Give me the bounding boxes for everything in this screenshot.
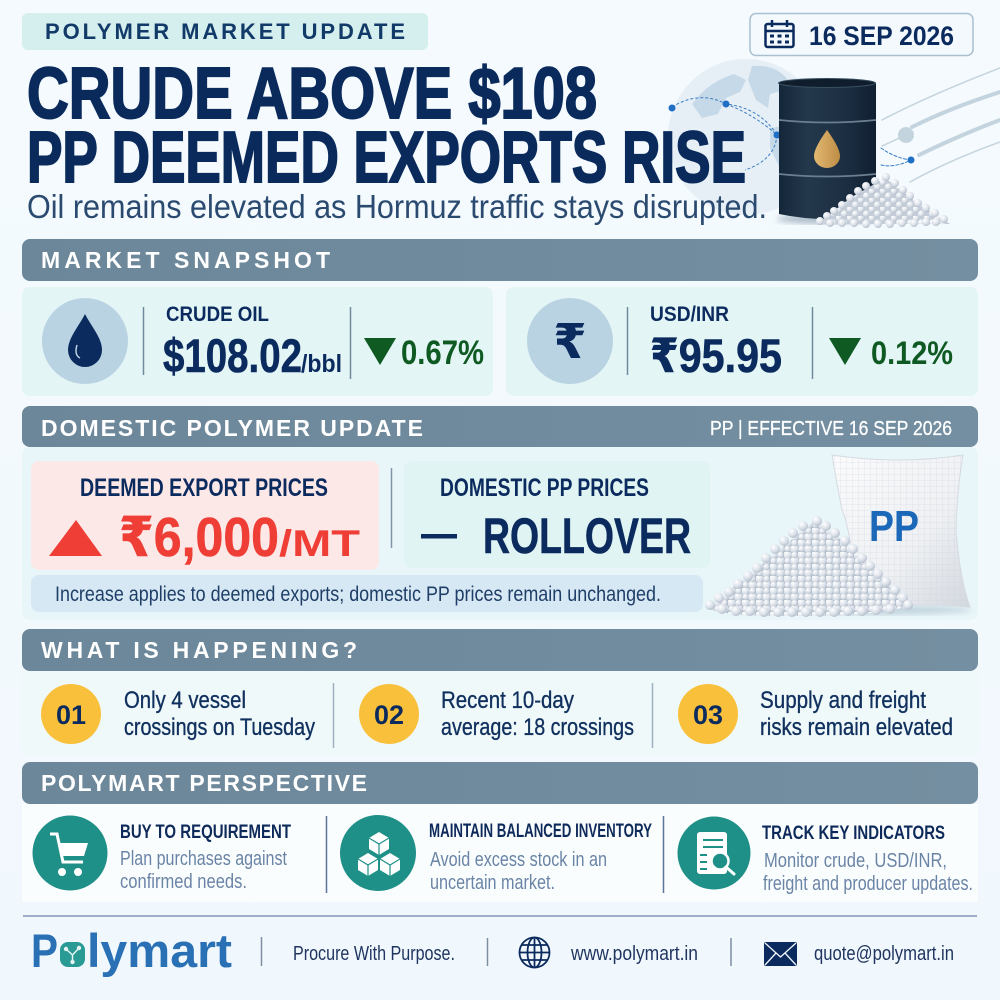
item 03: Supply and freight [760, 687, 926, 714]
panel: crude oil: CRUDE OIL [166, 303, 269, 326]
item 01: Only 4 vessel [124, 687, 246, 714]
item 02 [359, 684, 634, 744]
icon: cart [32, 816, 108, 890]
item 01 [41, 684, 315, 744]
icon: globe [520, 938, 550, 968]
main title [27, 54, 746, 198]
main title: CRUDE ABOVE $108 [27, 54, 597, 134]
item 01: 01 [56, 700, 86, 730]
icon: down arrow [364, 338, 396, 365]
panel: crude oil: 0.67% [401, 334, 484, 372]
panel: crude oil [22, 287, 493, 396]
icon: rupee [527, 298, 613, 384]
section header: what is happening: WHAT IS HAPPENING? [41, 637, 357, 663]
icon: rupee: ₹ [553, 316, 587, 369]
panel: deemed export prices: ₹6,000 [119, 506, 279, 568]
panel: domestic polymer [22, 447, 978, 620]
item: buy to requirement: confirmed needs. [120, 871, 247, 893]
icon: oil drop [42, 298, 128, 384]
icon: globe [668, 59, 824, 215]
logo: polymart: P [31, 924, 58, 977]
panel: deemed export prices [31, 461, 379, 570]
section header: market snapshot [22, 239, 978, 281]
panel: usd inr: 0.12% [871, 335, 953, 371]
item 03: risks remain elevated [760, 714, 953, 741]
section header: polymart perspective: POLYMART PERSPECTIVE [41, 770, 367, 796]
tagline: Procure With Purpose. [293, 943, 455, 965]
website: www.polymart.in [570, 943, 698, 965]
item: buy to requirement [32, 816, 291, 893]
section header: domestic polymer update: DOMESTIC POLYMER UPDATE [41, 415, 423, 441]
logo: polymart: lymart [87, 924, 232, 977]
item 03: 03 [693, 700, 723, 730]
item: maintain balanced inventory [340, 815, 652, 894]
panel: polymart perspective items [22, 804, 978, 902]
panel: crude oil: /bbl [301, 350, 342, 378]
icon: pp sack and pellets: PP [869, 502, 919, 551]
panel: domestic pp prices: DOMESTIC PP PRICES [440, 474, 649, 502]
panel: domestic pp prices: ROLLOVER [483, 508, 691, 564]
item: maintain balanced inventory: Avoid excess stock in an [430, 849, 607, 871]
section header: domestic polymer update [22, 406, 978, 447]
icon: up arrow [49, 520, 102, 556]
item 02: 02 [374, 700, 404, 730]
item: track key indicators: TRACK KEY INDICATORS [762, 823, 945, 844]
panel: deemed export prices: DEEMED EXPORT PRICES [80, 474, 328, 502]
item: buy to requirement: BUY TO REQUIREMENT [120, 822, 291, 843]
item: buy to requirement: Plan purchases against [120, 848, 287, 870]
note [31, 575, 703, 612]
email: quote@polymart.in [814, 943, 954, 965]
item 03 [678, 684, 953, 744]
panel: what is happening items [22, 671, 978, 755]
section header: what is happening [22, 629, 978, 671]
icon: envelope [764, 942, 797, 966]
header badge: polymer market update [22, 13, 428, 50]
icon: gold drop [814, 130, 840, 168]
item 02: average: 18 crossings [441, 714, 634, 741]
item 01: crossings on Tuesday [124, 714, 315, 741]
icon: document search [678, 816, 750, 890]
hero illustration: globe, barrel, pellets [668, 59, 1000, 228]
icon: pellet pile small [816, 173, 950, 228]
panel: usd inr [506, 287, 978, 396]
section header: market snapshot: MARKET SNAPSHOT [41, 247, 330, 273]
panel: domestic pp prices [404, 461, 710, 568]
panel: crude oil: $108.02 [163, 329, 302, 382]
panel: usd inr: ₹95.95 [650, 329, 782, 382]
item: maintain balanced inventory: uncertain market. [430, 872, 555, 894]
icon: pp sack and pellets [705, 455, 972, 617]
icon: calendar [766, 20, 794, 47]
decorative streams [881, 68, 1000, 182]
section header: polymart perspective [22, 762, 978, 804]
item 02: Recent 10-day [441, 687, 574, 714]
date badge [750, 14, 973, 56]
item: maintain balanced inventory: MAINTAIN BALANCED INVENTORY [429, 821, 652, 842]
date badge: 16 SEP 2026 [809, 21, 954, 51]
section header: domestic polymer update: PP | EFFECTIVE 16 SEP 2026 [710, 418, 952, 440]
note: Increase applies to deemed exports; domestic PP prices remain unchanged. [55, 583, 661, 606]
icon: cubes [340, 815, 416, 891]
icon: oil barrel [777, 78, 877, 224]
item: track key indicators: Monitor crude, USD/INR, [764, 850, 947, 872]
icon: down arrow [829, 338, 861, 365]
subtitle: Oil remains elevated as Hormuz traffic stays disrupted. [27, 188, 767, 225]
footer [31, 924, 954, 977]
item: track key indicators [678, 816, 973, 895]
main title: PP DEEMED EXPORTS RISE [27, 118, 746, 198]
header badge: polymer market update: POLYMER MARKET UPDATE [45, 19, 405, 44]
panel: deemed export prices: /MT [279, 523, 361, 564]
panel: usd inr: USD/INR [650, 303, 729, 326]
